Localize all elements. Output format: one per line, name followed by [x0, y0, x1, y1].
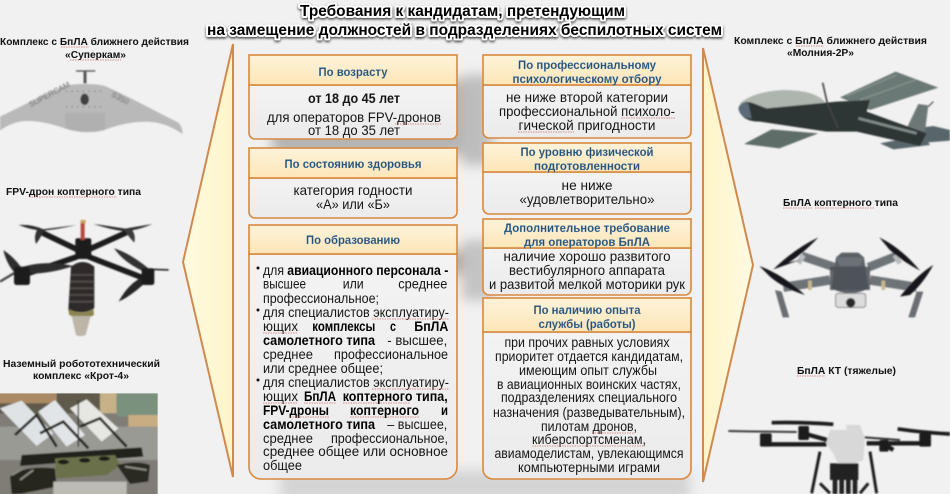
label: Superkam: Комплекс с БпЛА ближнего действия — [0, 36, 189, 48]
panel: education: для специалистов эксплуатиру- — [263, 304, 449, 320]
label: Molnia-2R: «Молния-2Р» — [787, 47, 854, 59]
label: Krot-4: Наземный робототехнический — [3, 358, 160, 370]
label: heavy UAV: БпЛА КТ (тяжелые) — [797, 365, 896, 377]
panel: psychological selection: психологическому отбору — [512, 74, 662, 86]
panel: psychological selection: профессиональной психоло- — [499, 103, 675, 119]
panel: physical fitness: По уровню физической — [520, 147, 654, 159]
panel: physical fitness: не ниже — [562, 177, 613, 193]
panel: education: По образованию — [306, 235, 400, 247]
panel: education: среднее — [398, 276, 447, 292]
panel: age: от 18 до 45 лет — [308, 90, 400, 106]
panel: education: высшее — [263, 276, 306, 292]
panel: additional requirement: для операторов БпЛА — [524, 237, 650, 249]
icon: Krot-4 ground robot photo — [0, 390, 161, 494]
label: Krot-4 — [3, 358, 160, 382]
icon: Superkam flying wing: S350 — [110, 90, 131, 107]
panel: additional requirement: и развитой мелкой моторики рук — [489, 276, 686, 292]
panel: education: самолетного типа — [263, 332, 375, 348]
label: Superkam: «Суперкам» — [65, 49, 126, 61]
icon: FPV drone with munition — [0, 220, 169, 336]
soft shadows behind panels — [272, 75, 690, 494]
panel: service experience — [483, 298, 691, 479]
panel: psychological selection: не ниже второй категории — [506, 89, 668, 105]
panel: education: БпЛА — [414, 318, 448, 334]
panel: psychological selection: гической пригодности — [518, 117, 656, 133]
panel: additional requirement: вестибулярного аппарата — [509, 262, 665, 278]
panel: education: ющих — [263, 388, 298, 404]
label: copter UAV: БпЛА коптерного типа — [783, 197, 898, 209]
panel: education: среднее — [263, 346, 313, 362]
icon: quadcopter drone — [759, 237, 933, 317]
panel: education: или — [343, 276, 364, 292]
label: Molnia-2R — [734, 35, 927, 59]
icon: Superkam flying wing — [0, 71, 183, 134]
panel: additional requirement: наличие хорошо развитого — [504, 248, 671, 264]
panel: education: профессиональное, — [331, 430, 448, 446]
panel: education: коптерного — [350, 402, 419, 418]
title: на замещение должностей в подразделениях беспилотных систем — [207, 22, 722, 39]
panel: education — [249, 225, 457, 479]
panel: education: для — [263, 262, 284, 278]
panel: service experience: По наличию опыта — [534, 305, 641, 317]
panel: health: «А» или «Б» — [316, 196, 390, 212]
left arrow — [183, 44, 233, 477]
panel: age: от 18 до 35 лет — [308, 122, 401, 138]
panel: service experience: авиамоделистам, увлекающимся — [494, 445, 684, 461]
icon: Superkam flying wing: SUPERCAM — [27, 80, 72, 109]
panel: education: и — [441, 402, 448, 418]
panel: education: - высшее, — [387, 332, 447, 348]
title: Требования к кандидатам, претендующим — [300, 3, 625, 20]
panel: education: профессиональное — [334, 346, 448, 362]
panel: education: ющих — [263, 318, 298, 334]
panel: psychological selection — [483, 55, 691, 138]
panel: education: среднее общее или основное — [263, 443, 448, 459]
panel: age: для операторов FPV-дронов — [267, 109, 441, 125]
panel: age: По возрасту — [318, 67, 388, 79]
label: FPV drone: FPV-дрон коптерного типа — [6, 186, 141, 198]
panel: education: комплексы — [312, 318, 375, 334]
icon: Molnia-2R fixed-wing drone — [738, 72, 950, 149]
panel: education: для специалистов эксплуатиру- — [263, 374, 449, 390]
panel: service experience: назначения (разведывательным), — [493, 404, 685, 420]
right arrow — [703, 48, 753, 482]
panel: physical fitness: подготовленности — [534, 161, 640, 173]
label: Krot-4: комплекс «Крот-4» — [33, 370, 129, 382]
panel: service experience: имеющим опыт службы — [519, 362, 657, 378]
icon: heavy agricultural drone — [728, 423, 950, 494]
panel: service experience: компьютерными играми — [518, 459, 660, 475]
panel: service experience: киберспортсменам, — [532, 431, 646, 447]
panel: education: авиационного персонала - — [287, 262, 449, 278]
panel: education: – высшее, — [387, 416, 447, 432]
panel: physical fitness — [483, 143, 691, 214]
panel: health — [249, 148, 457, 218]
panel: age — [249, 55, 457, 139]
panel: physical fitness: «удовлетворительно» — [520, 191, 655, 207]
panel: education: среднее — [263, 430, 313, 446]
label: Molnia-2R: Комплекс с БпЛА ближнего действия — [734, 35, 927, 47]
panel: education: общее — [263, 457, 302, 473]
panel: service experience: службы (работы) — [538, 319, 636, 331]
panel: education: коптерного типа, — [343, 388, 448, 404]
panel: education: FPV-дроны — [263, 402, 329, 418]
panel: health: категория годности — [294, 182, 412, 198]
panel: service experience: приоритет отдается кандидатам, — [495, 348, 683, 364]
panel: service experience: в авиационных воинских частях, — [497, 376, 681, 392]
panel: additional requirement — [483, 219, 691, 295]
panel: education: профессиональное; — [263, 290, 379, 306]
panel: psychological selection: По профессиональному — [518, 60, 657, 72]
title — [207, 3, 722, 39]
panel: service experience: подразделениях специального — [501, 389, 677, 405]
panel: additional requirement: Дополнительное требование — [504, 223, 670, 235]
panel: education: самолетного типа — [263, 416, 375, 432]
panel: service experience: при прочих равных условиях — [504, 334, 670, 350]
label: Superkam — [0, 36, 189, 61]
panel: education: БпЛА — [304, 388, 336, 404]
panel: service experience: пилотам дронов, — [541, 418, 637, 434]
panel: health: По состоянию здоровья — [284, 159, 422, 171]
panel: education: с — [390, 318, 396, 334]
panel: education: или среднее общее; — [263, 360, 383, 376]
